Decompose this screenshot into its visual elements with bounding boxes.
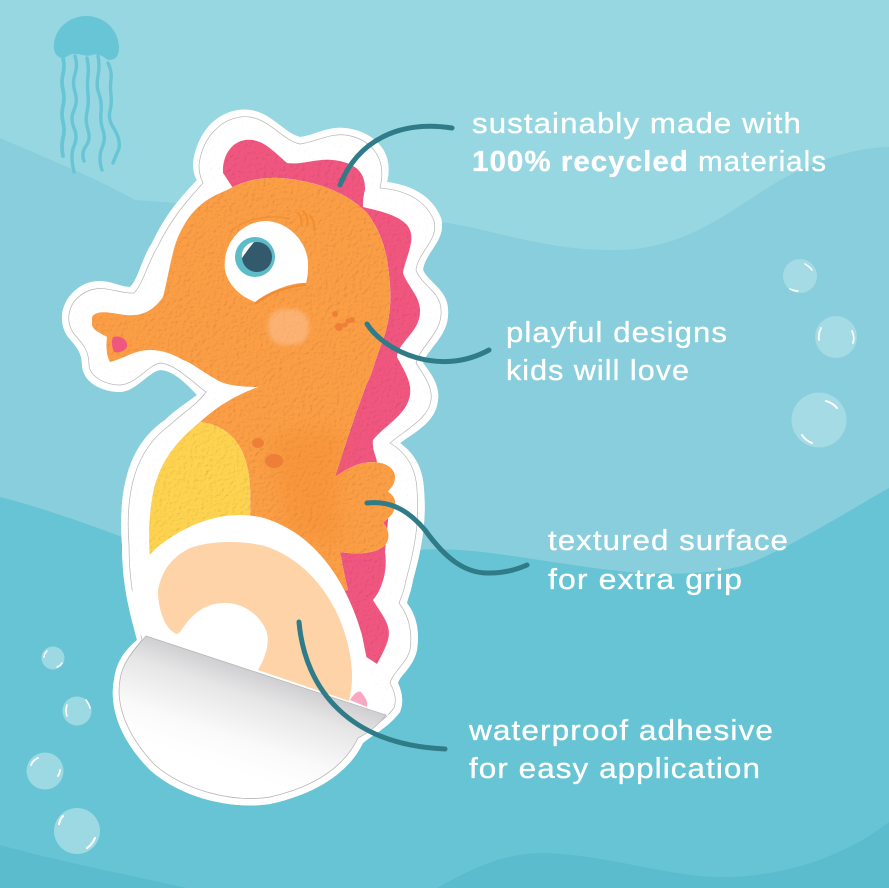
callout: playful designs: kids will love [506, 355, 690, 387]
bubbles: right group [783, 259, 857, 448]
peel fold: sticker backing shading [119, 636, 386, 798]
cheek [268, 309, 309, 345]
icon: jellyfish [54, 16, 119, 172]
callout: textured surface: textured surface [548, 525, 789, 557]
callout: waterproof adhesive [468, 715, 774, 785]
background: lower wave [0, 488, 889, 888]
callout: recycled materials: sustainably made with [472, 108, 802, 140]
orange body [92, 178, 395, 600]
leader line: recycled materials [340, 126, 452, 185]
seahorse sticker [62, 110, 448, 805]
pink underside patch [350, 692, 367, 707]
body shading [270, 431, 345, 545]
callout: waterproof adhesive: waterproof adhesive [468, 715, 774, 747]
pink mane [223, 140, 420, 664]
callout: recycled materials [472, 108, 827, 178]
die-cut line [69, 117, 441, 798]
leader line: playful designs [367, 324, 489, 362]
leader line: waterproof adhesive [299, 622, 445, 749]
background: bottom wave [0, 822, 889, 888]
freckles [252, 311, 355, 468]
yellow belly [149, 422, 250, 560]
nostril [112, 337, 127, 352]
leader line: textured surface [367, 503, 527, 573]
peeled-back sticker flap [132, 515, 389, 716]
callout: waterproof adhesive: for easy application [469, 753, 761, 785]
eyelashes [298, 211, 314, 229]
callout: playful designs: playful designs [506, 317, 728, 349]
bubbles: left group [26, 646, 100, 854]
callout: textured surface [548, 525, 789, 596]
callout: recycled materials: 100% recycled materials [472, 146, 827, 178]
callout: textured surface: for extra grip [548, 564, 743, 596]
eye [225, 217, 308, 304]
sticker backing outline [62, 110, 448, 805]
callout: playful designs [506, 317, 728, 387]
peach underside of body [158, 542, 352, 701]
